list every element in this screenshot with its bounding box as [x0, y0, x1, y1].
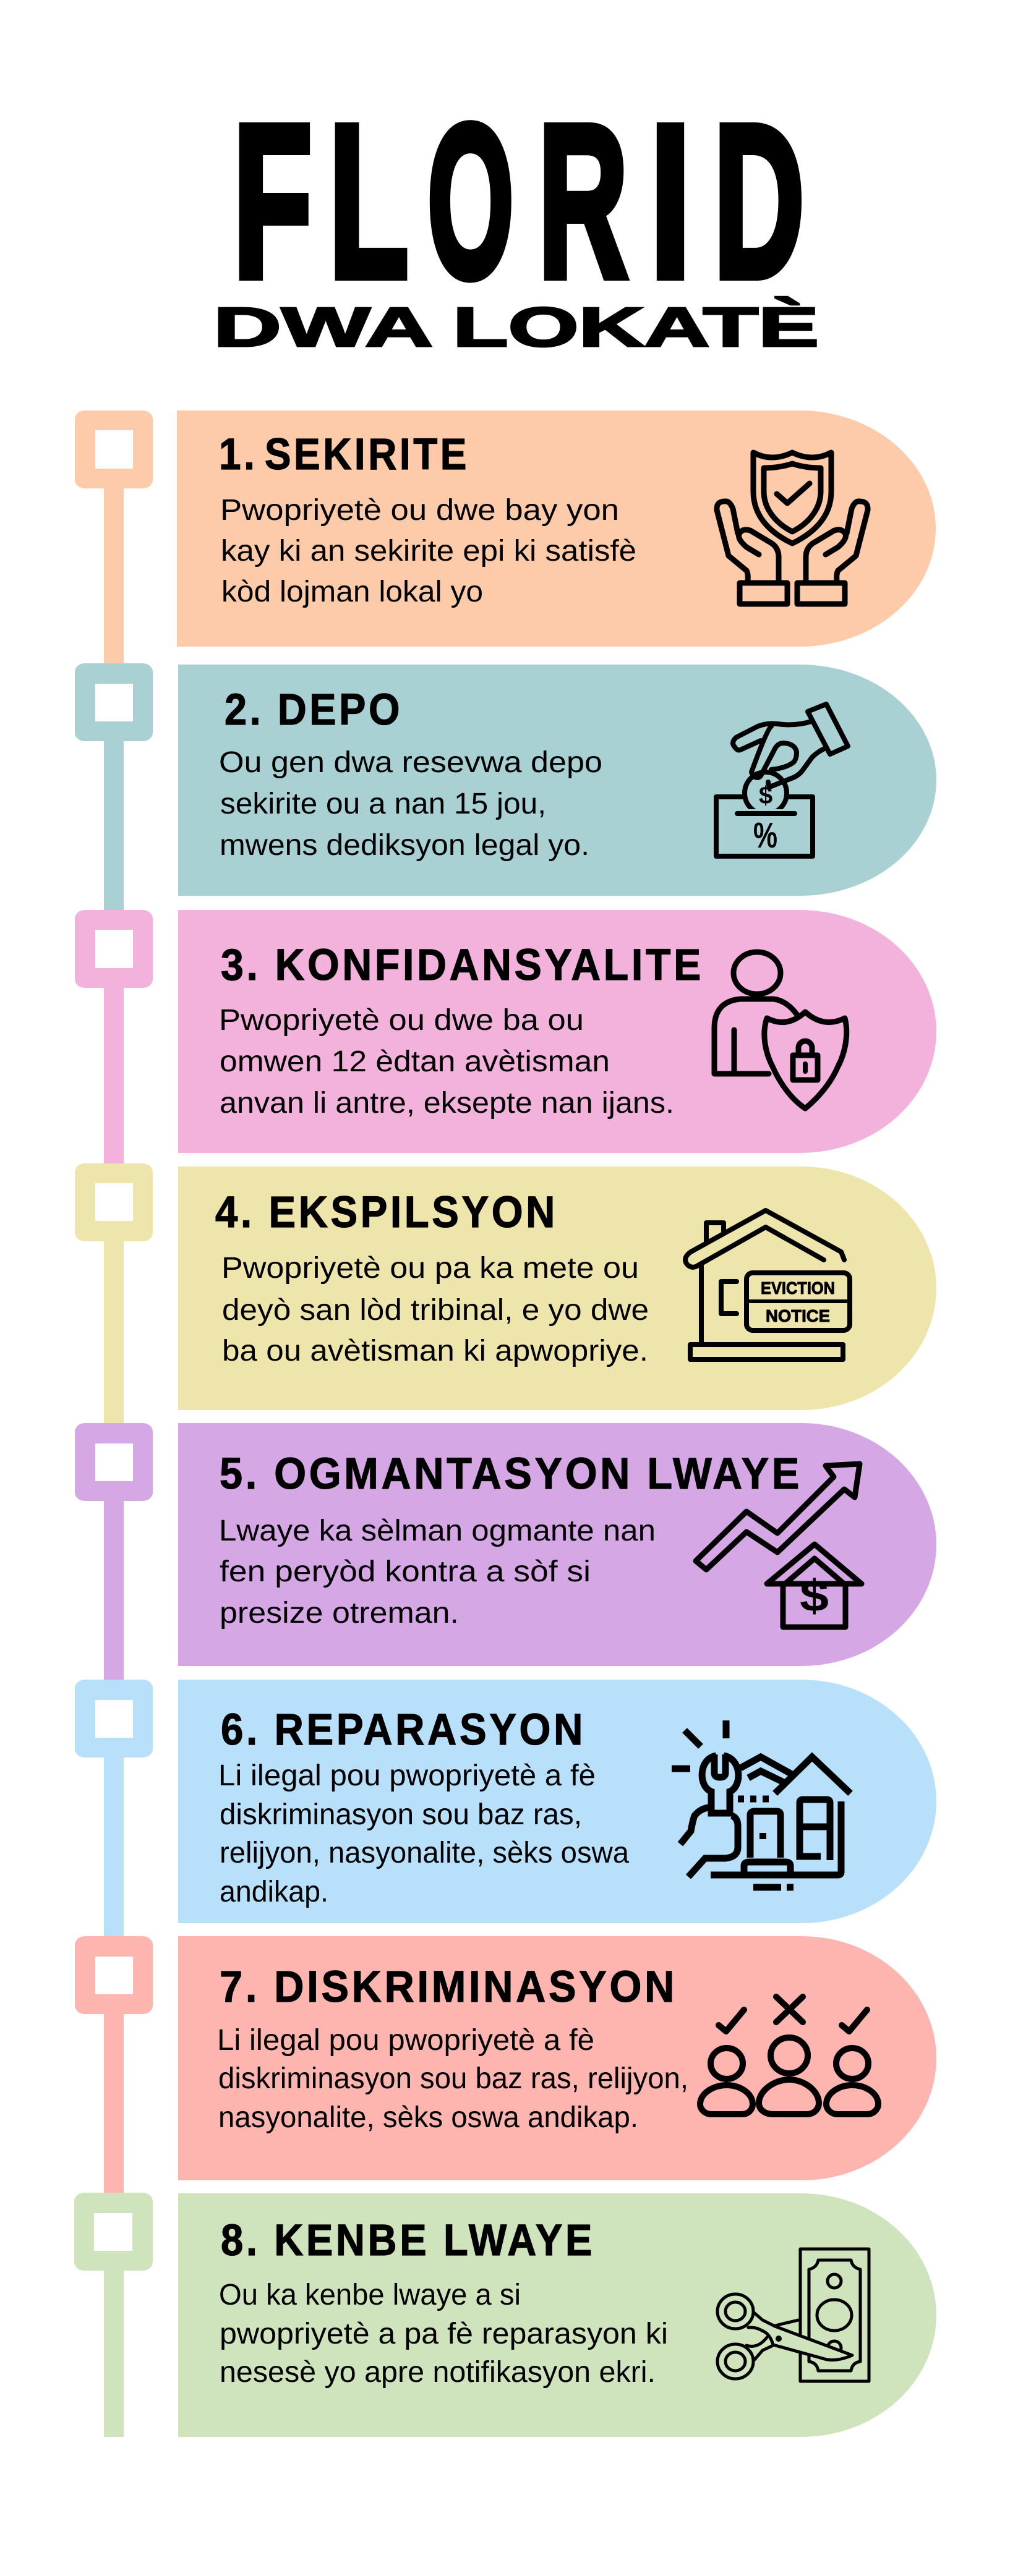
- timeline marker 4: [75, 1163, 153, 1424]
- title line: FLORID: D: [714, 79, 804, 323]
- icon: house with eviction notice: NOTICE: [766, 1306, 830, 1325]
- icon: rising arrow over house with dollar: $: [800, 1571, 829, 1621]
- panel background: [178, 1680, 936, 1923]
- icon: person with shield and lock: [714, 952, 847, 1108]
- icon: scissors cutting banknote: [717, 2249, 869, 2381]
- body text: Pwopriyetè ou dwe ba ou: [219, 1004, 584, 1037]
- body text: [218, 1759, 629, 1908]
- panel: 1 sekirite: [177, 410, 936, 647]
- body text: diskriminasyon sou baz ras, relijyon,: [218, 2062, 688, 2095]
- body text: Ou gen dwa resevwa depo: [219, 746, 602, 779]
- panel: 4 ekspilsyon: [178, 1167, 936, 1410]
- body text: sekirite ou a nan 15 jou,: [220, 788, 546, 820]
- icon: house with eviction notice: [685, 1210, 850, 1359]
- title line: FLORID: O: [427, 79, 514, 323]
- title line: FLORID: L: [329, 79, 409, 323]
- timeline marker 7: [75, 1936, 153, 2195]
- body text: [219, 2279, 668, 2389]
- icon: hand depositing coin: $: [759, 782, 772, 809]
- body text: nesesè yo apre notifikasyon ekri.: [220, 2356, 656, 2389]
- panel: 2 depo: [178, 665, 936, 896]
- icon: hand depositing coin: [716, 704, 848, 856]
- body text: fen peryòd kontra a sòf si: [220, 1555, 591, 1588]
- timeline marker 8: [74, 2193, 153, 2437]
- panel background: [178, 2193, 936, 2437]
- title line: FLORID: F: [233, 79, 312, 323]
- heading: 3. KONFIDANSYALITE: [221, 941, 704, 990]
- body text: kòd lojman lokal yo: [221, 576, 483, 608]
- panel background: [178, 1167, 936, 1410]
- heading: 8. KENBE LWAYE: [221, 2216, 595, 2265]
- timeline marker 3: [75, 910, 153, 1165]
- body text: Lwaye ka sèlman ogmante nan: [219, 1515, 656, 1547]
- body text: [219, 1515, 656, 1630]
- body text: andikap.: [220, 1876, 328, 1908]
- body text: [221, 1252, 649, 1367]
- body text: [220, 494, 636, 608]
- icon: three people with checks and cross: [700, 1997, 878, 2114]
- body text: diskriminasyon sou baz ras,: [220, 1798, 582, 1831]
- panel background: [178, 1936, 936, 2180]
- body text: ba ou avètisman ki apwopriye.: [222, 1335, 648, 1367]
- body text: [219, 1004, 674, 1120]
- panel: 3 konfidansyalite: [178, 910, 936, 1153]
- body text: mwens dediksyon legal yo.: [220, 829, 589, 862]
- timeline marker 1: [75, 410, 153, 665]
- subtitle: DWA LOKATÈ: DWA: [213, 297, 433, 359]
- title line: FLORID: [233, 79, 804, 323]
- body text: pwopriyetè a pa fè reparasyon ki: [220, 2318, 668, 2350]
- panel background: [178, 665, 936, 896]
- timeline marker 5: [75, 1423, 153, 1681]
- heading: 4. EKSPILSYON: [215, 1188, 558, 1237]
- timeline marker 2: [75, 663, 153, 911]
- icon: rising arrow over house with dollar: [696, 1464, 862, 1627]
- title: [213, 79, 819, 359]
- panel: 8 kenbe lwaye: [178, 2193, 936, 2437]
- subtitle: DWA LOKATÈ: [213, 296, 819, 359]
- heading: 1. SEKIRITE: [219, 430, 469, 479]
- body text: presize otreman.: [220, 1597, 459, 1630]
- heading: 5. OGMANTASYON LWAYE: [220, 1450, 802, 1498]
- panel: 6 reparasyon: [178, 1680, 936, 1923]
- panel: 5 ogmantasyon lwaye: [178, 1423, 936, 1666]
- body text: relijyon, nasyonalite, sèks oswa: [220, 1837, 629, 1869]
- body text: Pwopriyetè ou pa ka mete ou: [221, 1252, 639, 1285]
- heading: 2. DEPO: [225, 686, 403, 734]
- icon: hand depositing coin: %: [753, 815, 777, 856]
- body text: kay ki an sekirite epi ki satisfè: [221, 535, 636, 567]
- body text: deyò san lòd tribinal, e yo dwe: [222, 1294, 649, 1327]
- title line: FLORID: R: [538, 79, 628, 323]
- icon: wrench and house repair: [672, 1720, 850, 1887]
- title line: FLORID: I: [649, 79, 691, 323]
- panel background: [177, 410, 936, 647]
- heading: 7. DISKRIMINASYON: [220, 1963, 677, 2012]
- body text: Li ilegal pou pwopriyetè a fè: [217, 2024, 594, 2057]
- body text: nasyonalite, sèks oswa andikap.: [218, 2101, 638, 2134]
- panel: 7 diskriminasyon: [178, 1936, 936, 2180]
- panel background: [178, 1423, 936, 1666]
- body text: omwen 12 èdtan avètisman: [220, 1045, 610, 1078]
- body text: anvan li antre, eksepte nan ijans.: [220, 1087, 674, 1120]
- icon: hands holding shield: [717, 453, 868, 604]
- body text: Li ilegal pou pwopriyetè a fè: [218, 1759, 596, 1792]
- heading: 6. REPARASYON: [221, 1706, 586, 1754]
- body text: [217, 2024, 688, 2134]
- subtitle: DWA LOKATÈ: LOKATÈ: [453, 296, 819, 359]
- panel background: [178, 910, 936, 1153]
- icon: house with eviction notice: EVICTION: [761, 1278, 835, 1298]
- timeline marker 6: [75, 1680, 153, 1937]
- body text: [219, 746, 602, 862]
- body text: Ou ka kenbe lwaye a si: [219, 2279, 521, 2311]
- body text: Pwopriyetè ou dwe bay yon: [220, 494, 619, 527]
